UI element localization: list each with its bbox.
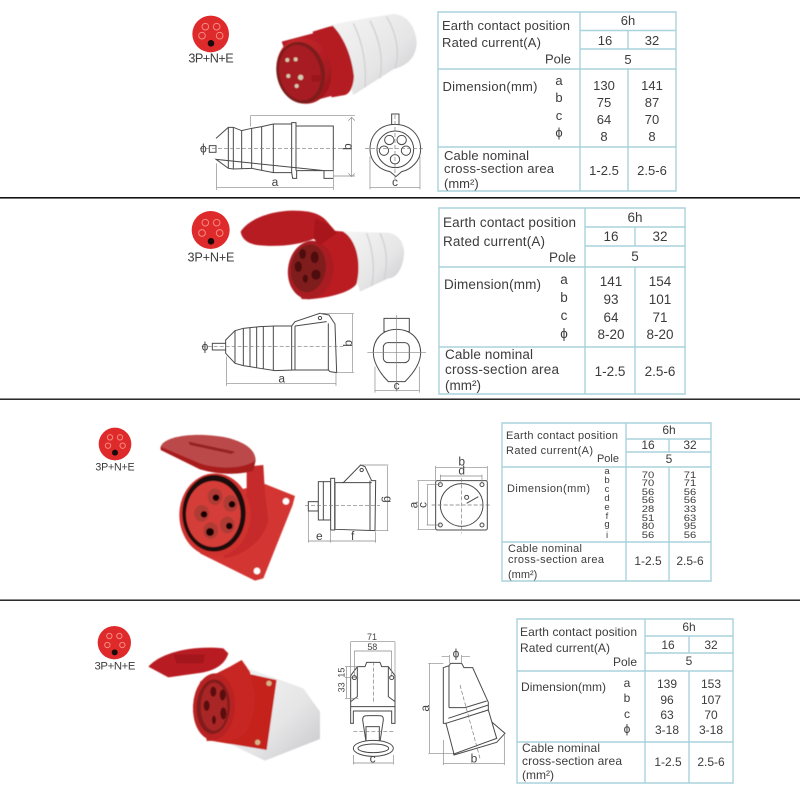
table: connector specification: Dimension(mm) xyxy=(444,277,541,292)
drawing: plug front view xyxy=(365,114,425,189)
drawing: wall socket side view: a xyxy=(418,705,432,712)
table: connector specification: Pole xyxy=(549,250,576,265)
table: plug specification: Pole xyxy=(545,52,571,66)
table: plug specification: 64 xyxy=(597,112,611,127)
table: plug specification: 141 xyxy=(641,78,663,93)
table: connector specification: 141 xyxy=(600,274,622,289)
table: wall socket specification: cross-section area xyxy=(522,754,622,768)
table: wall socket specification xyxy=(517,619,733,783)
drawing: connector side view: ϕ xyxy=(202,340,209,354)
table: connector specification: ϕ xyxy=(560,326,568,341)
table: connector specification: 64 xyxy=(603,310,619,325)
table: panel socket specification: cross-section area xyxy=(508,554,605,566)
table: panel socket specification: 56 xyxy=(642,495,654,506)
table: connector specification: 16 xyxy=(603,229,619,244)
drawing: plug side view: ϕ xyxy=(200,142,207,156)
table: wall socket specification: 107 xyxy=(701,693,721,707)
panel: plug product xyxy=(188,12,676,191)
icon: pin layout wall socket: 3P+N+E xyxy=(94,661,136,673)
table: panel socket specification: 1-2.5 xyxy=(634,554,662,568)
drawing: plug side view xyxy=(200,116,355,190)
drawing: panel socket front view: a xyxy=(406,501,420,508)
drawing: panel socket front view: d xyxy=(458,464,465,478)
drawing: panel socket front view xyxy=(406,454,492,533)
divider lines xyxy=(0,197,800,601)
icon: pin layout plug xyxy=(188,16,234,66)
icon: pin layout connector xyxy=(187,211,234,264)
table: panel socket specification: 32 xyxy=(683,438,697,452)
photo: red and white plug xyxy=(270,14,417,109)
table: panel socket specification: 71 xyxy=(684,470,696,481)
table: plug specification: a xyxy=(555,73,563,88)
table: panel socket specification: 70 xyxy=(642,470,654,481)
table: panel socket specification: 16 xyxy=(641,438,655,452)
drawing: panel socket side view xyxy=(305,465,395,543)
table: panel socket specification: 56 xyxy=(642,487,654,498)
table: connector specification: 8-20 xyxy=(597,327,625,342)
table: panel socket specification: c xyxy=(605,484,610,495)
table: plug specification: 75 xyxy=(597,95,611,110)
table: panel socket specification: (mm²) xyxy=(508,569,537,581)
table: panel socket specification: 28 xyxy=(642,504,654,515)
drawing: wall socket front view: 58 xyxy=(367,642,377,652)
table: plug specification xyxy=(438,12,676,191)
table: wall socket specification: b xyxy=(624,691,631,705)
table: panel socket specification: 63 xyxy=(684,513,696,524)
table: panel socket specification: a xyxy=(604,466,610,477)
table: wall socket specification: Rated current(A) xyxy=(520,641,610,655)
table: panel socket specification: 56 xyxy=(684,487,696,498)
table: connector specification: Earth contact position xyxy=(443,215,576,230)
icon: pin layout connector: 3P+N+E xyxy=(187,250,234,264)
table: panel socket specification: 56 xyxy=(642,530,654,541)
table: connector specification: 8-20 xyxy=(646,327,674,342)
table: connector specification: c xyxy=(561,308,568,323)
table: panel socket specification: Cable nominal xyxy=(508,543,582,555)
drawing: wall socket front view: 15 xyxy=(337,668,347,678)
table: connector specification: 6h xyxy=(627,210,643,225)
table: plug specification: Cable nominal xyxy=(444,148,529,163)
table: wall socket specification: Pole xyxy=(613,655,637,669)
drawing: panel socket side view: e xyxy=(316,529,323,543)
photo: red and white connector xyxy=(241,211,404,302)
table: wall socket specification: 3-18 xyxy=(699,723,723,737)
table: plug specification: ϕ xyxy=(555,125,563,140)
table: panel socket specification: 2.5-6 xyxy=(676,554,704,568)
table: plug specification: 32 xyxy=(645,33,659,48)
table: panel socket specification: e xyxy=(604,502,610,513)
table: wall socket specification: 16 xyxy=(661,638,675,652)
table: connector specification: Rated current(A) xyxy=(443,234,545,249)
table: panel socket specification: g xyxy=(604,519,610,530)
table: wall socket specification: (mm²) xyxy=(522,768,554,782)
table: panel socket specification: Rated current(A) xyxy=(506,445,593,457)
table: wall socket specification: 5 xyxy=(686,654,693,668)
table: plug specification: 130 xyxy=(593,78,615,93)
table: panel socket specification: 33 xyxy=(684,504,696,515)
drawing: wall socket side view: ϕ xyxy=(453,646,460,660)
drawing: wall socket side view xyxy=(418,646,505,766)
table: plug specification: 87 xyxy=(645,95,659,110)
drawing: wall socket front view xyxy=(337,632,395,765)
drawing: connector side view xyxy=(202,313,355,386)
table: panel socket specification: 70 xyxy=(642,478,654,489)
table: wall socket specification: 1-2.5 xyxy=(654,755,682,769)
table: connector specification: 5 xyxy=(631,249,639,264)
drawing: connector side view: b xyxy=(341,340,355,347)
table: connector specification: 154 xyxy=(649,274,672,289)
table: connector specification: cross-section area xyxy=(445,362,559,377)
table: panel socket specification: f xyxy=(606,511,609,522)
drawing: panel socket front view: b xyxy=(458,454,465,468)
drawing: connector side view: a xyxy=(278,372,285,386)
icon: pin layout panel socket: 3P+N+E xyxy=(95,461,135,473)
table: panel socket specification: 6h xyxy=(662,423,676,437)
table: plug specification: 8 xyxy=(648,129,656,144)
table: panel socket specification: 95 xyxy=(684,521,696,532)
table: plug specification: 2.5-6 xyxy=(637,163,667,178)
drawing: connector front view: c xyxy=(394,378,400,392)
table: connector specification: 101 xyxy=(649,292,671,307)
table: connector specification: 1-2.5 xyxy=(595,364,625,379)
table: panel socket specification: 80 xyxy=(642,521,654,532)
drawing: wall socket front view: c xyxy=(370,751,376,765)
table: wall socket specification: ϕ xyxy=(624,722,631,736)
drawing: panel socket side view: f xyxy=(351,529,355,543)
table: panel socket specification: i xyxy=(606,530,608,541)
table: wall socket specification: 139 xyxy=(657,677,677,691)
table: wall socket specification: Cable nominal xyxy=(522,741,600,755)
icon: pin layout panel socket xyxy=(95,428,135,473)
table: panel socket specification: b xyxy=(604,475,610,486)
table: plug specification: Rated current(A) xyxy=(442,35,541,50)
table: plug specification: 8 xyxy=(600,129,608,144)
table: plug specification: 70 xyxy=(645,112,659,127)
table: plug specification: b xyxy=(555,90,563,105)
table: plug specification: (mm²) xyxy=(444,176,479,191)
drawing: plug side view: b xyxy=(340,143,354,150)
table: connector specification: 71 xyxy=(652,310,668,325)
table: connector specification: 2.5-6 xyxy=(645,364,675,379)
table: wall socket specification: c xyxy=(624,707,630,721)
drawing: wall socket front view: 33 xyxy=(337,682,347,692)
drawing: wall socket front view: 71 xyxy=(367,632,377,642)
table: panel socket specification: d xyxy=(604,493,610,504)
table: plug specification: Earth contact position xyxy=(442,18,570,33)
table: plug specification: 6h xyxy=(621,13,635,28)
table: connector specification: 32 xyxy=(652,229,668,244)
table: connector specification: Cable nominal xyxy=(445,347,533,362)
table: connector specification: 93 xyxy=(603,292,619,307)
table: wall socket specification: 96 xyxy=(660,693,674,707)
table: wall socket specification: 2.5-6 xyxy=(697,755,725,769)
panel: connector product xyxy=(187,208,685,394)
table: panel socket specification: 5 xyxy=(666,452,673,466)
table: panel socket specification: Dimension(mm) xyxy=(507,483,590,495)
table: wall socket specification: 3-18 xyxy=(655,723,679,737)
table: connector specification: b xyxy=(560,290,568,305)
table: connector specification xyxy=(439,208,685,394)
table: plug specification: 5 xyxy=(624,52,632,67)
table: plug specification: Dimension(mm) xyxy=(442,79,538,94)
table: plug specification: c xyxy=(556,108,563,123)
table: wall socket specification: a xyxy=(624,676,631,690)
table: panel socket specification: Earth contact position xyxy=(506,430,618,442)
table: panel socket specification: 51 xyxy=(642,513,654,524)
panel: panel-mounted socket product xyxy=(95,423,711,581)
table: wall socket specification: 6h xyxy=(682,620,696,634)
drawing: wall socket side view: b xyxy=(471,752,478,766)
table: panel socket specification xyxy=(502,423,711,581)
photo: wall-mounted socket xyxy=(148,648,320,761)
panel: wall-mounted socket product xyxy=(94,619,733,783)
table: panel socket specification: Pole xyxy=(597,453,619,465)
table: panel socket specification: 71 xyxy=(684,478,696,489)
table: plug specification: 16 xyxy=(598,33,612,48)
photo: panel-mounted socket xyxy=(161,435,295,581)
table: panel socket specification: 56 xyxy=(684,530,696,541)
table: wall socket specification: 63 xyxy=(660,708,674,722)
table: wall socket specification: 70 xyxy=(704,708,718,722)
drawing: connector front view xyxy=(367,315,426,393)
table: wall socket specification: 32 xyxy=(704,638,718,652)
icon: pin layout wall socket xyxy=(94,626,136,673)
table: wall socket specification: 153 xyxy=(701,677,721,691)
drawing: panel socket front view: c xyxy=(416,502,430,508)
drawing: panel socket side view: g xyxy=(381,496,395,503)
drawing: plug side view: a xyxy=(272,175,279,189)
table: panel socket specification: 56 xyxy=(684,495,696,506)
drawing: plug front view: c xyxy=(392,175,398,189)
table: connector specification: (mm²) xyxy=(445,378,481,393)
table: wall socket specification: Earth contact position xyxy=(520,625,637,639)
icon: pin layout plug: 3P+N+E xyxy=(188,52,234,66)
table: plug specification: cross-section area xyxy=(444,161,555,176)
table: connector specification: a xyxy=(560,272,568,287)
table: wall socket specification: Dimension(mm) xyxy=(521,680,606,694)
table: plug specification: 1-2.5 xyxy=(589,163,619,178)
